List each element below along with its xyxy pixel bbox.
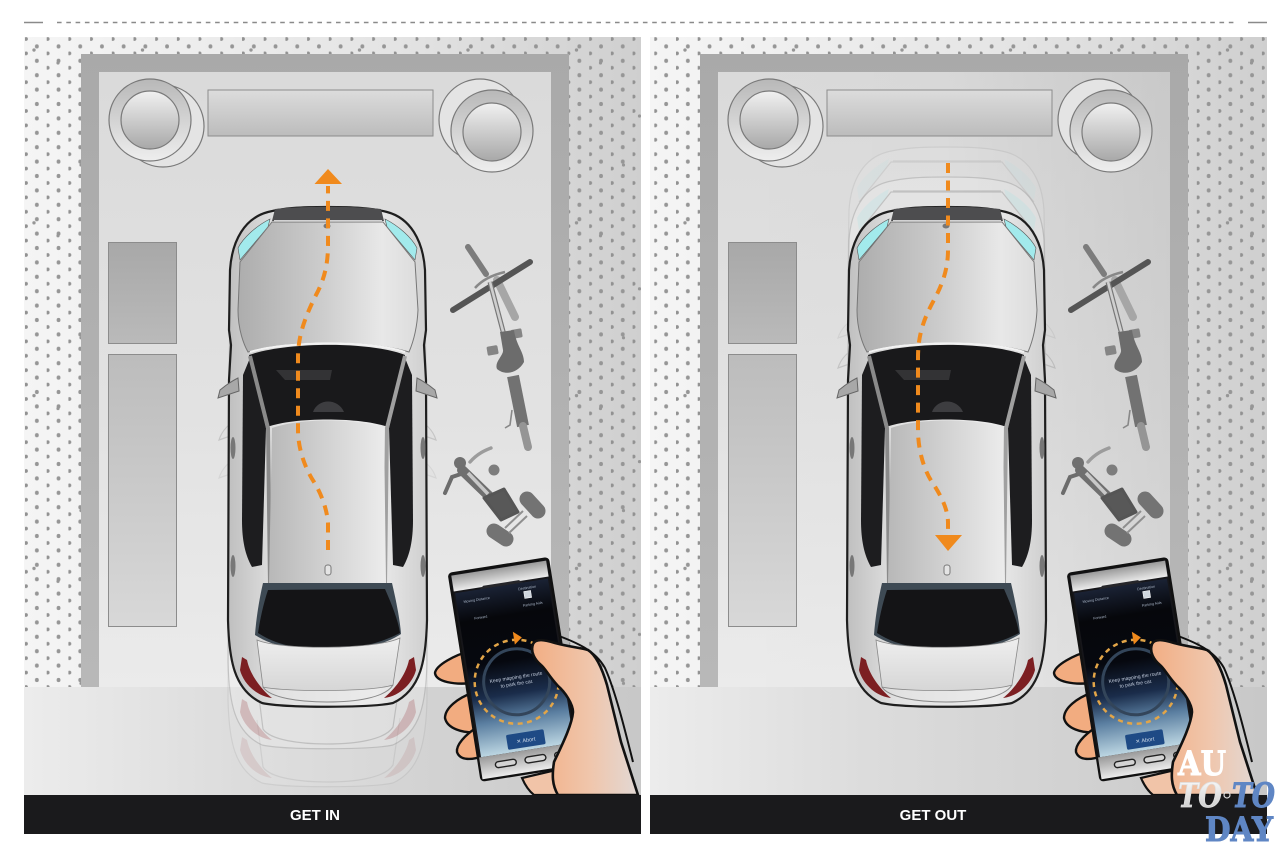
abort button: ✕ Abort	[516, 736, 536, 745]
wheels stack right	[439, 79, 533, 172]
wheels stack left	[109, 79, 204, 167]
dashed route arrow	[918, 163, 962, 551]
watermark	[1177, 744, 1275, 848]
driveway	[24, 687, 641, 795]
phone buttons	[495, 750, 573, 768]
panel: get out	[650, 37, 1267, 834]
phone status labels: Destination	[1137, 585, 1155, 591]
icon: bicycle	[453, 247, 530, 447]
dial message: Keep mapping the route	[489, 671, 543, 685]
phone icon	[524, 590, 532, 598]
phone	[449, 558, 580, 780]
dial message: to park the car.	[500, 679, 534, 690]
top rule	[24, 22, 1267, 24]
cabinet upper	[108, 242, 176, 344]
fingers	[1054, 651, 1103, 759]
caption bar: get out: GET OUT	[900, 807, 966, 824]
caption bar: get in	[24, 795, 641, 834]
cabinet lower	[108, 354, 176, 626]
hand	[1141, 636, 1257, 795]
phone status labels	[463, 584, 544, 622]
phone status labels: Forward	[1093, 615, 1107, 621]
watermark: TO	[1178, 776, 1222, 816]
phone icon	[1143, 590, 1151, 598]
car	[218, 207, 437, 707]
stippled ground	[24, 37, 641, 687]
dial message: to park the car.	[1119, 679, 1153, 690]
caption bar: get in: GET IN	[290, 807, 340, 824]
phone status labels: Forward	[474, 615, 488, 621]
phone status labels: Moving Distance	[463, 596, 490, 604]
phone status labels: Moving Distance	[1082, 596, 1109, 604]
ghost car positions	[838, 147, 1055, 677]
ghost car positions	[219, 249, 436, 787]
dial	[1086, 626, 1184, 730]
icon: tricycle	[1063, 448, 1156, 539]
hand	[522, 636, 638, 795]
phone buttons	[1114, 750, 1192, 768]
phone status labels: Parking Aids	[523, 601, 543, 608]
driveway	[650, 687, 1267, 795]
garage walls	[700, 54, 1188, 687]
stippled ground	[650, 37, 1267, 687]
phone status labels: Parking Aids	[1142, 601, 1162, 608]
garage floor	[99, 72, 551, 687]
dial	[467, 626, 565, 730]
dial message: Keep mapping the route	[1108, 671, 1162, 685]
phone	[1068, 558, 1199, 780]
cabinet upper	[728, 242, 796, 344]
dashed route arrow	[298, 169, 342, 550]
panel: get in	[24, 37, 641, 834]
garage walls	[81, 54, 569, 687]
abort button: ✕ Abort	[1135, 736, 1155, 745]
caption bar: get out	[650, 795, 1267, 834]
abort button	[1125, 729, 1165, 750]
workbench	[827, 90, 1052, 136]
icon: tricycle	[445, 448, 538, 539]
cabinet lower	[728, 354, 796, 626]
car	[837, 207, 1056, 707]
watermark: AU	[1177, 744, 1226, 784]
wheels stack right	[1058, 79, 1152, 172]
icon: bicycle	[1071, 247, 1148, 447]
wheels stack left	[728, 79, 823, 167]
garage floor	[718, 72, 1170, 687]
abort button	[506, 729, 546, 750]
workbench	[208, 90, 433, 136]
fingers	[435, 651, 484, 759]
phone status labels: Destination	[518, 585, 536, 591]
phone status labels	[1082, 584, 1163, 622]
